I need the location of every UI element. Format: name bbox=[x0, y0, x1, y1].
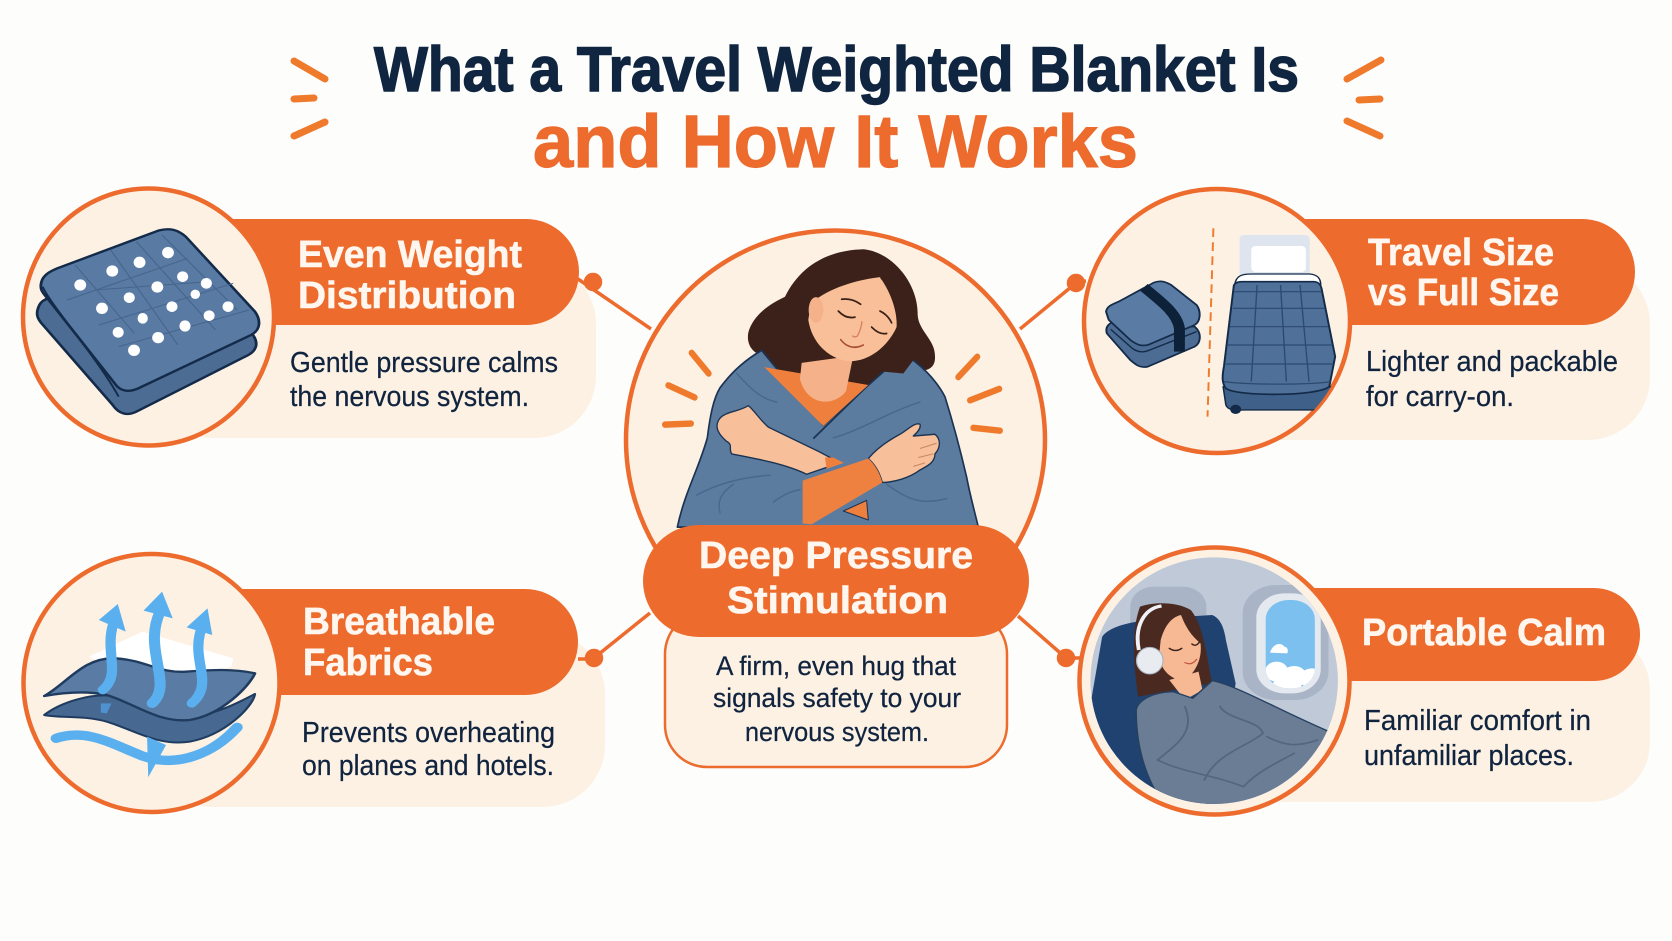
icon circle bbox=[1084, 189, 1350, 453]
calm rays bbox=[665, 353, 1000, 431]
heading: Stimulation bbox=[727, 580, 948, 622]
panel: deep pressure stimulation bbox=[626, 230, 1045, 767]
sleeve bbox=[803, 459, 882, 524]
heading: Deep Pressure bbox=[699, 535, 973, 577]
description background bbox=[1220, 630, 1650, 802]
description: for carry-on. bbox=[1366, 381, 1514, 413]
icon circle bbox=[23, 188, 274, 446]
icon: packed blanket and full size bed bbox=[1106, 228, 1335, 417]
description background bbox=[1220, 262, 1650, 440]
description bbox=[290, 347, 558, 413]
description: Gentle pressure calms bbox=[290, 347, 558, 379]
face details bbox=[838, 299, 892, 347]
heading bbox=[298, 234, 522, 317]
illustration: woman hugging herself in a blanket bbox=[665, 249, 1000, 527]
hand right bbox=[868, 424, 939, 482]
description background bbox=[150, 262, 596, 438]
right hair lock bbox=[868, 278, 917, 374]
heading: Breathable bbox=[303, 601, 495, 643]
description bbox=[1364, 705, 1591, 772]
heading bbox=[699, 535, 973, 622]
icon: layered fabric with airflow arrows bbox=[44, 592, 255, 777]
title line 1: What a Travel Weighted Blanket Is bbox=[374, 35, 1299, 105]
heading pill bbox=[643, 525, 1029, 637]
heading pill bbox=[150, 219, 579, 325]
neck bbox=[800, 356, 853, 402]
description bbox=[713, 651, 961, 747]
description box bbox=[665, 612, 1007, 767]
heading pill bbox=[150, 589, 578, 695]
heading bbox=[1368, 232, 1559, 314]
heading: vs Full Size bbox=[1368, 272, 1559, 314]
description: Familiar comfort in bbox=[1364, 705, 1591, 737]
panel: portable calm bbox=[1080, 548, 1650, 814]
icon: traveller sleeping on a plane bbox=[1090, 557, 1338, 804]
ear bbox=[809, 297, 823, 323]
heading: Fabrics bbox=[303, 642, 433, 684]
panel: even weight distribution bbox=[23, 188, 596, 446]
panel: breathable fabrics bbox=[24, 554, 605, 812]
heading bbox=[303, 601, 495, 684]
panel: travel size vs full size bbox=[1084, 189, 1650, 453]
lower sleeve bbox=[843, 500, 868, 520]
shirt bbox=[764, 367, 868, 426]
heading: Even Weight bbox=[298, 234, 522, 276]
description: nervous system. bbox=[745, 717, 929, 747]
description: A firm, even hug that bbox=[716, 651, 956, 681]
description: on planes and hotels. bbox=[302, 750, 554, 782]
description: signals safety to your bbox=[713, 683, 961, 713]
description bbox=[302, 717, 555, 782]
icon circle bbox=[1080, 548, 1350, 814]
hand and forearm left bbox=[717, 406, 840, 474]
hair bbox=[748, 249, 935, 395]
heading: Portable Calm bbox=[1362, 612, 1606, 654]
description: unfamiliar places. bbox=[1364, 740, 1574, 772]
heading: Travel Size bbox=[1368, 232, 1554, 274]
heading: Distribution bbox=[298, 275, 516, 317]
description: the nervous system. bbox=[290, 381, 529, 413]
connectors bbox=[578, 274, 1086, 666]
icon: quilted blanket with weight dots bbox=[37, 229, 259, 414]
icon circle bbox=[24, 554, 280, 812]
blanket bbox=[677, 350, 978, 527]
title rays left bbox=[294, 61, 325, 136]
central circle bbox=[626, 230, 1045, 650]
face bbox=[808, 277, 897, 361]
description: Prevents overheating bbox=[302, 717, 555, 749]
description background bbox=[150, 632, 605, 807]
description bbox=[1366, 346, 1618, 413]
heading pill bbox=[1220, 219, 1635, 325]
title line 2: and How It Works bbox=[533, 100, 1138, 183]
title bbox=[374, 35, 1299, 183]
description: Lighter and packable bbox=[1366, 346, 1618, 378]
heading pill bbox=[1220, 588, 1640, 681]
title rays right bbox=[1347, 60, 1381, 136]
